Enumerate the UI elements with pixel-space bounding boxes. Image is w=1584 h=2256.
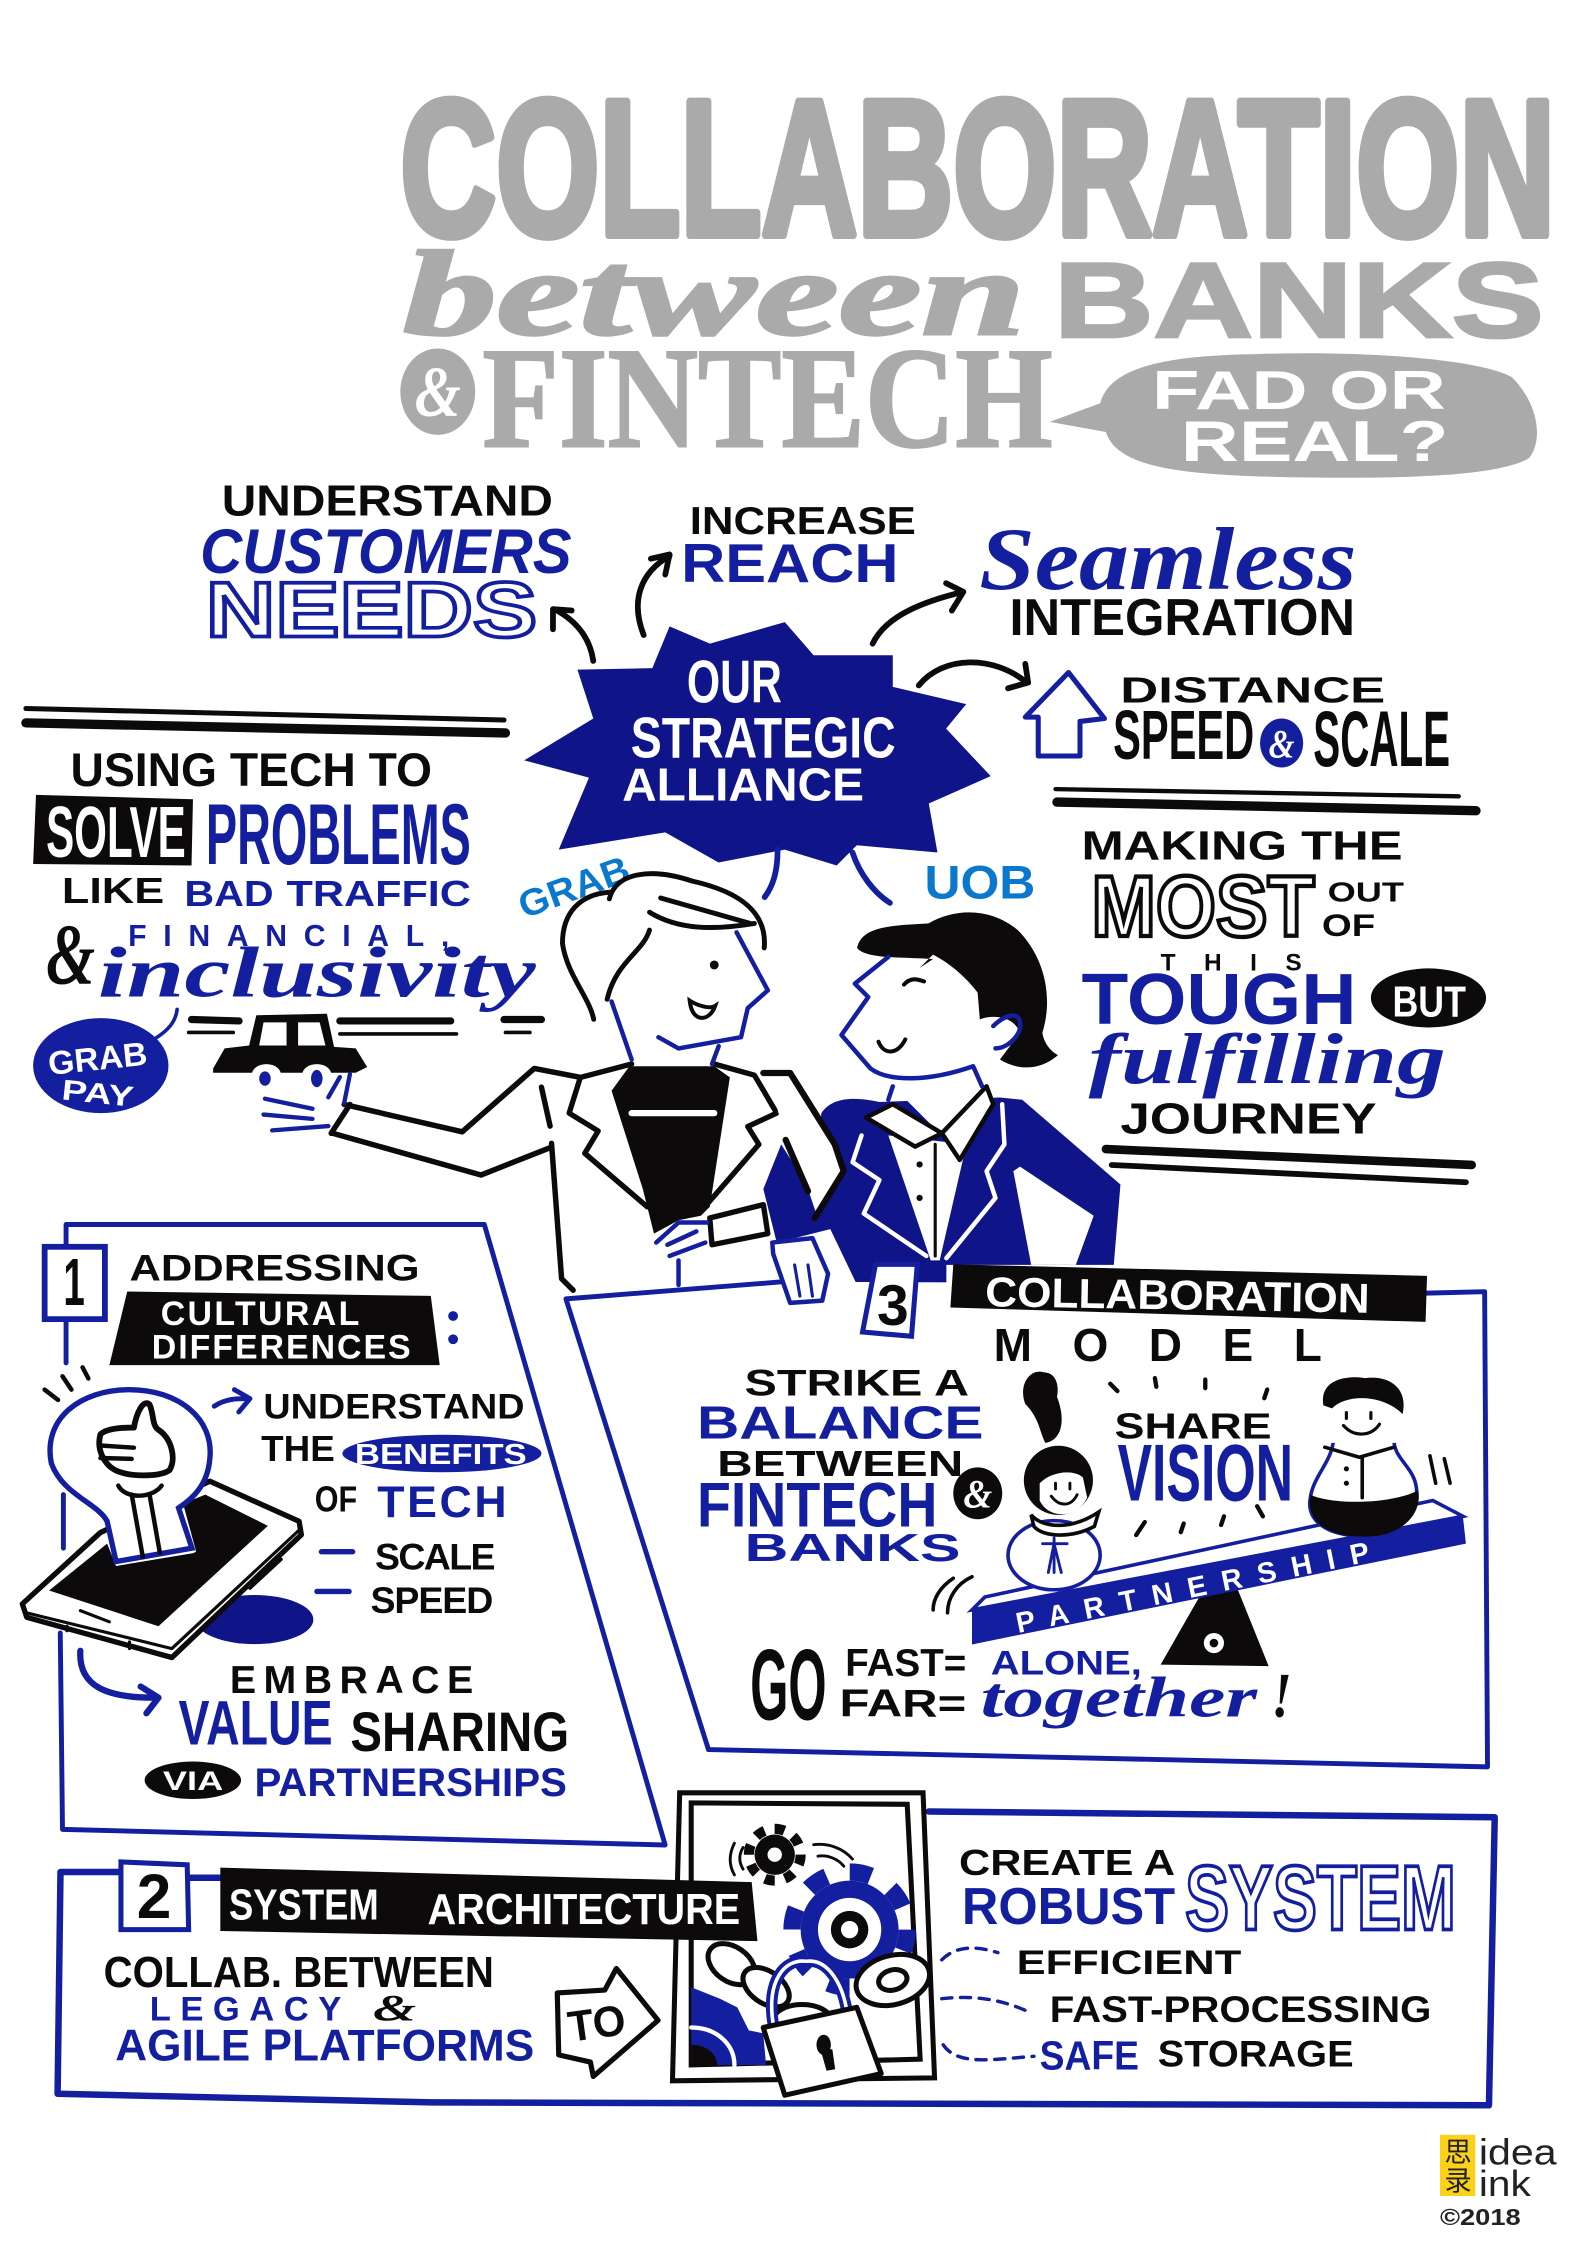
text: go fast alone, far together: ALONE,	[991, 1645, 1142, 1683]
neck	[893, 1082, 987, 1135]
character: uob man hand over panel	[772, 1238, 828, 1303]
arrow: to: TO	[565, 1996, 629, 2052]
icon: machine frame	[672, 1793, 935, 2081]
list: efficient fast-processing safe storage: SAFE	[1040, 2033, 1139, 2078]
text: understand the benefits of tech	[261, 1388, 541, 1527]
heading: system architecture: ARCHITECTURE	[428, 1886, 740, 1934]
text: strike a balance: BANKS	[744, 1527, 960, 1570]
callout: seamless integration: Seamless	[979, 510, 1356, 609]
text: collab between legacy and agile platforms: COLLAB. BETWEEN	[104, 1949, 494, 1997]
list: scale and speed	[317, 1536, 496, 1621]
heading: system architecture: SYSTEM	[229, 1882, 379, 1930]
shirt	[888, 1135, 966, 1260]
icon: large gear	[792, 1872, 907, 1987]
text: collab between legacy and agile platforms: LEGACY	[150, 1990, 341, 2028]
callout: making the most out of this journey: MOST	[1092, 859, 1315, 955]
callout: making the most out of this journey: OF	[1322, 907, 1375, 943]
face	[841, 957, 1020, 1100]
title	[400, 60, 1555, 478]
hair	[857, 912, 1058, 1067]
text block: using tech to solve problems: BAD	[184, 873, 274, 914]
logo: idea ink: 录	[1444, 2165, 1472, 2196]
text: create a robust system: SYSTEM	[1185, 1847, 1456, 1950]
text block: using tech to solve problems: LIKE	[62, 870, 164, 911]
text: strike a balance: BALANCE	[697, 1397, 984, 1449]
text block: using tech to solve problems	[33, 744, 537, 1012]
text: go fast alone, far together	[750, 1629, 1292, 1741]
text: go fast alone, far together: GO	[750, 1629, 827, 1741]
callout: making the most out of this journey: BUT	[1392, 979, 1466, 1027]
icon: chain	[700, 1935, 935, 2036]
text: go fast alone, far together: together	[981, 1666, 1258, 1729]
text block: using tech to solve problems: SOLVE	[46, 793, 186, 873]
arrow: to	[557, 1968, 658, 2076]
arrow: to customers	[553, 609, 593, 661]
text: embrace value sharing via partnerships: VIA	[163, 1766, 223, 1796]
ticks around vision	[1110, 1378, 1267, 1535]
solve highlight	[33, 795, 193, 865]
text: strike a balance: STRIKE A	[744, 1361, 969, 1403]
icon: corner gear	[691, 1987, 766, 2065]
callout: making the most out of this journey: MAKING THE	[1081, 824, 1403, 869]
text: go fast alone, far together: !	[1272, 1660, 1292, 1730]
text block: using tech to solve problems: inclusivity	[98, 932, 537, 1012]
list: efficient fast-processing safe storage: FAST-PROCESSING	[1050, 1988, 1431, 2030]
badge: number 1: 1	[63, 1245, 85, 1320]
text: understand the benefits of tech: OF	[315, 1480, 357, 1520]
heading: addressing cultural differences: ADDRESSING	[129, 1246, 420, 1288]
heading: addressing cultural differences: CULTURAL	[161, 1295, 359, 1333]
sparks above bulb	[45, 1367, 88, 1400]
icon: ampersand badge	[400, 348, 475, 435]
collar	[866, 1086, 993, 1160]
list: efficient fast-processing safe storage: EFFICIENT	[1017, 1944, 1241, 1982]
callout: seamless integration: INTEGRATION	[1009, 588, 1355, 646]
heading: addressing cultural differences	[109, 1246, 458, 1366]
callout: increase reach: INCREASE	[690, 500, 916, 543]
text: strike a balance	[697, 1361, 1002, 1570]
panel: strategic alliance starburst: OUR	[687, 648, 782, 716]
panel: strategic alliance starburst: ALLIANCE	[622, 759, 864, 811]
callout: making the most out of this journey	[1081, 824, 1486, 1143]
text: create a robust system	[959, 1842, 1456, 1950]
text: create a robust system: CREATE A	[959, 1842, 1175, 1883]
tablet shadow	[196, 1595, 313, 1644]
logo: idea ink: idea	[1479, 2131, 1558, 2172]
logo: idea ink: ink	[1479, 2163, 1532, 2204]
panel: 1 addressing cultural differences	[22, 1225, 665, 1845]
speed dashes around car	[189, 1020, 541, 1034]
text: understand the benefits of tech: BENEFITS	[355, 1439, 527, 1471]
speech bubble: fad or real	[1050, 353, 1537, 478]
text: create a robust system: ROBUST	[962, 1877, 1175, 1935]
badge: number 1	[45, 1245, 105, 1320]
list: scale and speed: SCALE	[375, 1536, 496, 1578]
panel: 2 system architecture	[58, 1793, 1495, 2105]
speech bubble: fad or real: FAD OR	[1152, 359, 1446, 421]
speech bubble: grab pay: GRAB	[46, 1036, 149, 1083]
callout: making the most out of this journey: fulfilling	[1089, 1019, 1446, 1099]
character: grab woman outstretched arm	[264, 1068, 579, 1290]
text block: using tech to solve problems: USING TECH TO	[71, 744, 432, 797]
text block: using tech to solve problems: PROBLEMS	[206, 787, 471, 883]
icon: ampersand badge: &	[415, 352, 461, 432]
seesaw plank: PARTNERSHIP	[1013, 1537, 1372, 1640]
callout: distance speed and scale	[1113, 670, 1450, 783]
callout: making the most out of this journey: JOURNEY	[1120, 1095, 1377, 1143]
icon: padlock	[763, 1961, 881, 2095]
text: understand the benefits of tech: THE	[261, 1429, 335, 1469]
logo: idea ink	[1440, 2131, 1558, 2230]
text: understand the benefits of tech: TECH	[377, 1478, 507, 1527]
icon: light bulb with thumbs up	[50, 1390, 210, 1583]
text: strike a balance: FINTECH	[697, 1470, 937, 1540]
but pill	[1371, 968, 1486, 1027]
icon: tablet	[22, 1481, 301, 1658]
callout: distance speed and scale: &	[1269, 721, 1295, 766]
speech bubble: grab pay	[33, 1009, 177, 1114]
icon: car	[213, 1014, 367, 1087]
label: grab: GRAB	[513, 847, 635, 926]
text: embrace value sharing via partnerships	[145, 1658, 569, 1805]
character: bank man	[1310, 1377, 1450, 1537]
heading: collaboration model	[950, 1264, 1427, 1371]
text: share vision: SHARE	[1115, 1406, 1272, 1447]
text: understand the benefits of tech: UNDERSTAND	[263, 1388, 525, 1427]
hand	[656, 1222, 708, 1285]
logo: idea ink: 思	[1444, 2136, 1472, 2167]
callout: making the most out of this journey: TOUGH	[1081, 960, 1356, 1040]
title line: fintech: FINTECH	[482, 319, 1053, 478]
speech bubble: fad or real: REAL?	[1181, 410, 1449, 474]
cuff	[710, 1205, 768, 1245]
character: uob man	[763, 912, 1120, 1285]
divider lines upper left	[26, 708, 505, 733]
panel frame	[58, 1812, 1495, 2105]
icon: small gear	[730, 1829, 852, 1881]
list: scale and speed: SPEED	[371, 1579, 493, 1621]
title line: between: between	[403, 227, 1025, 361]
callout: understand customers needs	[200, 478, 572, 653]
icon: up arrow	[1025, 672, 1104, 756]
top	[612, 1066, 730, 1234]
hair	[562, 874, 764, 1019]
divider lines lower right	[1106, 1149, 1472, 1182]
callout: understand customers needs: NEEDS	[206, 567, 537, 653]
callout: increase reach: REACH	[681, 532, 899, 594]
text: embrace value sharing via partnerships: EMBRACE	[230, 1658, 473, 1702]
logo: idea ink: ©2018	[1440, 2204, 1521, 2230]
seesaw fulcrum	[1161, 1584, 1269, 1666]
text block: using tech to solve problems: TRAFFIC	[287, 873, 471, 914]
arrow: to seamless	[873, 583, 963, 644]
speech bubble: grab pay: PAY	[60, 1074, 135, 1114]
text: collab between legacy and agile platforms: &	[373, 1988, 416, 2029]
dashed connectors	[942, 1948, 1034, 2060]
text: embrace value sharing via partnerships: VALUE	[179, 1689, 333, 1759]
suit	[763, 1097, 1120, 1285]
text: strike a balance: &	[963, 1472, 992, 1517]
arrow: to understand	[214, 1390, 250, 1412]
panel: strategic alliance starburst: STRATEGIC	[631, 706, 896, 770]
callout: increase reach	[681, 500, 916, 594]
panel: 3 collaboration model	[566, 1264, 1488, 1767]
speech tails	[765, 850, 890, 903]
face	[612, 932, 768, 1064]
text: collab between legacy and agile platforms	[104, 1949, 534, 2071]
panel frame	[60, 1225, 665, 1845]
heading: collaboration model: MODEL	[994, 1319, 1322, 1371]
badge: number 2	[121, 1862, 189, 1932]
text: strike a balance: BETWEEN	[717, 1443, 963, 1484]
text: share vision: VISION	[1117, 1428, 1293, 1518]
seesaw plank	[972, 1500, 1466, 1644]
text: collab between legacy and agile platforms: AGILE PLATFORMS	[115, 2022, 534, 2071]
badge: number 2: 2	[137, 1862, 171, 1932]
character: grab woman	[562, 874, 844, 1285]
callout: making the most out of this journey: THIS	[1161, 950, 1302, 977]
arrow: to distance	[919, 662, 1028, 688]
text: go fast alone, far together: FAST=	[845, 1642, 966, 1685]
text: embrace value sharing via partnerships: SHARING	[350, 1700, 569, 1763]
title line: banks: BANKS	[1054, 241, 1544, 360]
text: go fast alone, far together: FAR=	[840, 1682, 966, 1725]
heading: collaboration model: COLLABORATION	[985, 1268, 1370, 1322]
panel: strategic alliance starburst	[524, 622, 991, 903]
sleeve	[768, 1073, 844, 1216]
text block: using tech to solve problems: &	[46, 907, 95, 1003]
text: embrace value sharing via partnerships: PARTNERSHIPS	[254, 1760, 567, 1805]
callout: making the most out of this journey: OUT	[1328, 876, 1404, 907]
arrow: to reach	[638, 554, 670, 635]
text block: using tech to solve problems: FINANCIAL,	[128, 920, 449, 953]
text: share vision	[1115, 1406, 1293, 1518]
heading: addressing cultural differences: DIFFERENCES	[152, 1328, 411, 1366]
callout: distance speed and scale: SPEED	[1113, 696, 1254, 774]
benefits pill	[342, 1435, 541, 1472]
list: efficient fast-processing safe storage: STORAGE	[1158, 2032, 1354, 2074]
character: fintech woman	[933, 1372, 1100, 1613]
callout: understand customers needs: UNDERSTAND	[222, 478, 553, 526]
label: uob: UOB	[924, 857, 1035, 910]
callout: distance speed and scale: SCALE	[1313, 694, 1450, 783]
badge: number 3	[863, 1264, 917, 1338]
callout: distance speed and scale: DISTANCE	[1120, 670, 1385, 711]
list: efficient fast-processing safe storage	[1017, 1944, 1431, 2078]
divider lines upper right	[1056, 789, 1476, 811]
lapels	[569, 1064, 777, 1211]
heading: system architecture	[220, 1868, 757, 1941]
arrow: to value sharing	[80, 1651, 158, 1713]
callout: understand customers needs: CUSTOMERS	[200, 517, 572, 587]
callout: seamless integration	[979, 510, 1356, 646]
badge: number 3: 3	[877, 1274, 909, 1338]
